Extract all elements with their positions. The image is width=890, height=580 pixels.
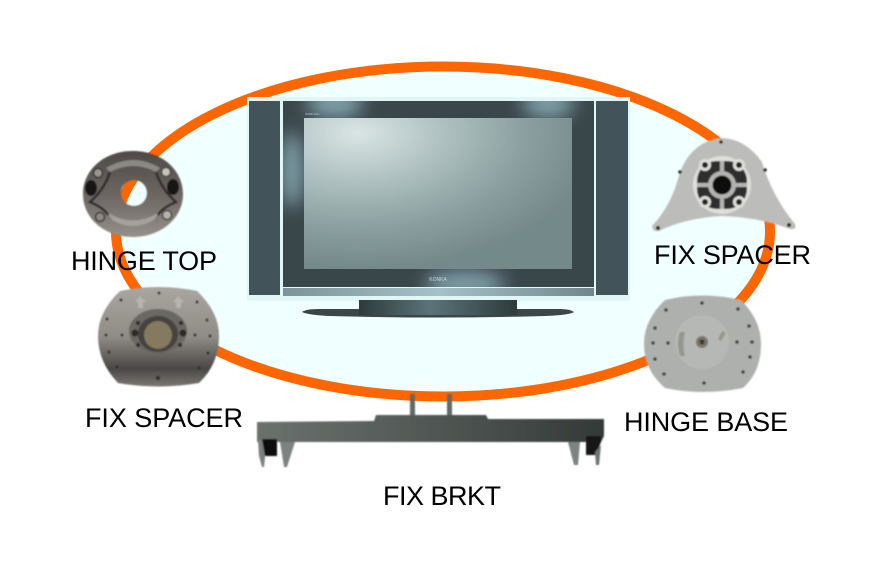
stand neck [359,300,517,315]
tv bezel [283,101,594,287]
television [247,87,630,318]
part: hinge base [644,296,761,392]
tv logo: KONKA [429,277,447,283]
diagram: TV hinge parts [73,62,810,505]
part: hinge top [83,151,183,237]
label: hinge top: HINGE TOP [71,246,217,276]
tv backing [247,97,630,301]
part: fix spacer left [98,287,219,386]
left speaker [249,101,280,295]
label: fix spacer right: FIX SPACER [654,240,811,270]
label: fix bracket: FIX BRKT [383,481,501,511]
part: fix spacer right [652,138,795,231]
part: fix bracket [257,394,604,467]
stand base [302,309,574,318]
label: fix spacer left: FIX SPACER [85,403,243,433]
label: hinge base: HINGE BASE [624,407,788,437]
right speaker [596,101,628,295]
orange ellipse [116,66,770,396]
tv model text: WIDE 32in [305,112,320,116]
tv screen [304,118,572,269]
silver strip [283,288,594,296]
